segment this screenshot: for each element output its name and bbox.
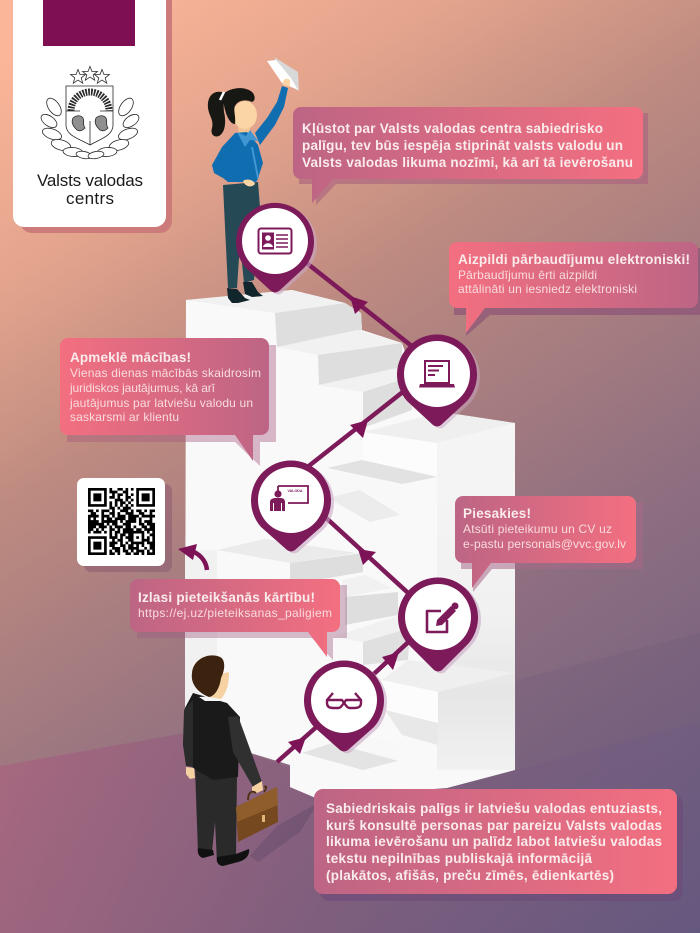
callout text: kurš konsultē personas par pareizu Valsts valodas [326,818,662,833]
icon: pencil on sheet [427,602,458,632]
callout text: jautājumus par latviešu valodu un [69,396,253,410]
route lines [275,238,437,762]
collar [199,696,220,701]
hair [221,88,255,124]
wall band right [447,633,700,788]
icon: ID card [258,228,292,254]
staircase [185,290,515,798]
curved arrow to QR code [178,544,207,570]
icon: glasses [327,693,361,708]
callout text: likuma ievērošanu un palīdz labot latviešu valodas [326,834,662,849]
man figure [183,655,318,866]
shoes [227,282,263,303]
callout: read the procedure [130,579,347,660]
callout text [463,506,626,551]
callout text [326,801,662,883]
pin 5: glasses [304,661,387,754]
QR code [88,489,155,554]
callout: who is the assistant [314,789,683,901]
briefcase [236,787,278,842]
callout text: Piesakies! [463,506,531,521]
callout text: Pārbaudījumu ērti aizpildi [458,268,597,282]
callout text: palīgu, tev būs iespēja stiprināt valsts valodu un [302,138,623,153]
jacket [183,693,240,780]
QR code card [77,478,172,572]
hair tie [220,92,224,100]
neck [237,122,250,140]
hair [192,655,224,697]
cuffs and hands [186,767,263,793]
pin 3: lecture [251,461,334,554]
ear and neck [209,672,229,699]
callout text [302,121,633,170]
callout text: Kļūstot par Valsts valodas centra sabiedrisko [302,121,603,136]
ponytail [208,92,225,137]
callout text: Izlasi pieteikšanās kārtību! [138,590,315,605]
right sleeve [228,716,262,787]
callout text: Atsūti pieteikumu un CV uz [463,522,612,536]
arrowheads [288,296,399,754]
callout text: Sabiedriskais palīgs ir latviešu valodas entuziasts, [326,801,662,816]
callout text: Valsts valodas likuma nozīmi, kā arī tā ievērošanu [302,155,633,170]
callout text: Vienas dienas mācībās skaidrosim [70,366,261,380]
organisation name: Valsts valodas [37,171,143,190]
logo card [13,0,172,233]
trousers [195,768,237,862]
callout: attend training [60,338,276,466]
man shadow [250,803,318,862]
left sleeve [183,700,193,767]
callout text: tekstu nepilnības publiskajā informācijā [326,851,592,866]
organisation name [37,171,143,208]
hands [243,79,290,186]
shoes [198,848,249,866]
callout text: saskarsmi ar klientu [70,410,179,424]
callout text: (plakātos, afišās, preču zīmēs, ēdienkartēs) [326,868,614,883]
collar [237,130,259,178]
callout: apply [455,496,643,592]
pin 4: application form [398,578,481,674]
trousers [223,182,260,288]
raised sleeve [255,86,288,145]
pin 1: ID card [236,203,317,294]
callout text: juridiskos jautājumus, kā arī [69,381,216,395]
callout text [458,252,690,296]
callout text [69,350,261,424]
blouse [212,132,263,182]
icon: laptop [419,360,455,388]
callout text: e-pastu personals@vvc.gov.lv [463,537,626,551]
callout text: attālināti un iesniedz elektroniski [458,282,637,296]
paper sheet [267,57,299,91]
callout text: https://ej.uz/pieteiksanas_paligiem [138,606,332,620]
organisation name: centrs [66,189,114,208]
floor [0,721,700,933]
woman figure [208,57,299,303]
icon: coat of arms [39,66,141,160]
callout text [138,590,332,620]
icon: presenter at board: VALODA [288,489,303,493]
callout text: Apmeklē mācības! [70,350,191,365]
pin 2: laptop [397,335,480,428]
callout text: Aizpildi pārbaudījumu elektroniski! [458,252,690,267]
face [233,101,257,129]
maroon tab [43,0,135,46]
callout: online test [449,242,700,336]
callout: becoming an assistant [293,107,648,205]
